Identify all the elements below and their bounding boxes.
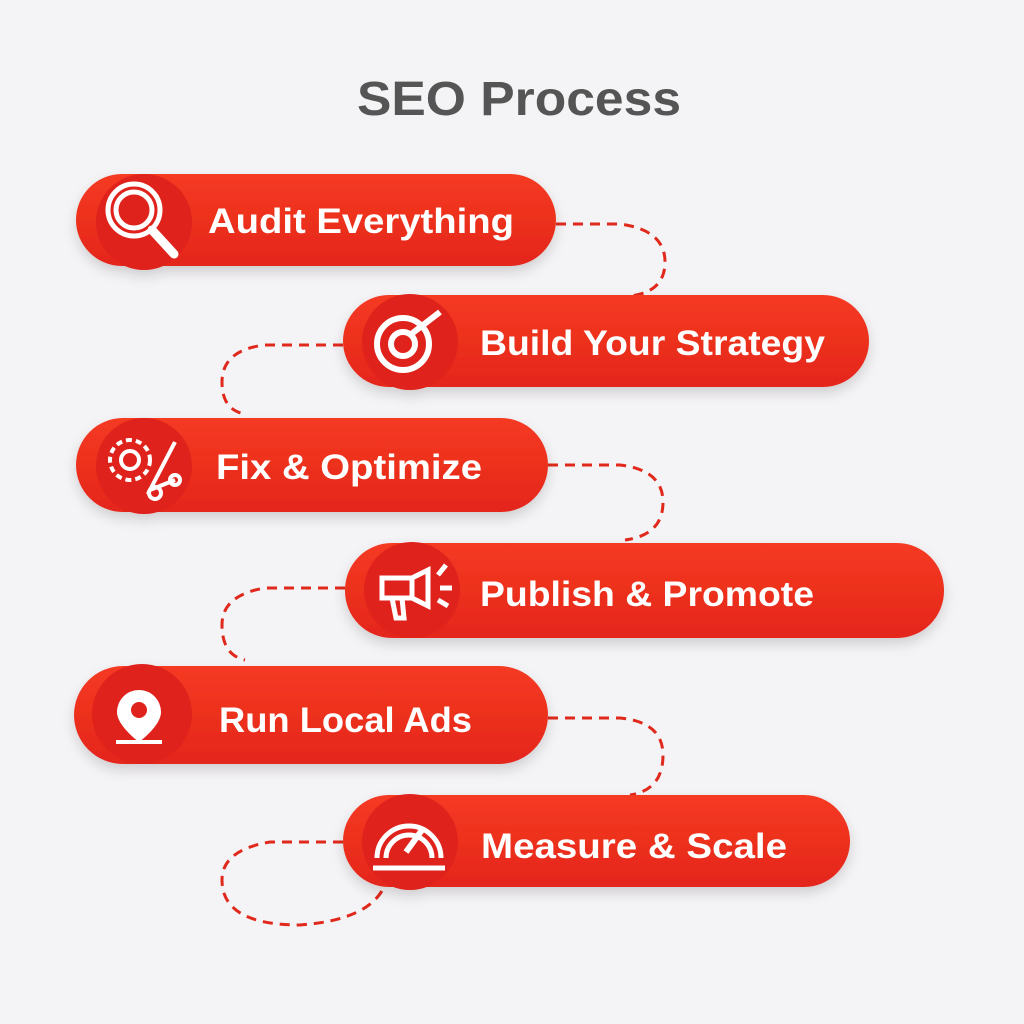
pill: Fix & Optimize <box>76 418 548 514</box>
title: SEO Process <box>357 73 681 126</box>
pill: Audit Everything <box>76 174 556 270</box>
pill: Measure & Scale: Measure & Scale <box>481 827 787 866</box>
pill: Run Local Ads <box>74 664 548 764</box>
pill: Build Your Strategy: Build Your Strategy <box>480 324 826 363</box>
pill: Fix & Optimize: Fix & Optimize <box>216 448 482 487</box>
pill: Run Local Ads: Run Local Ads <box>219 701 472 740</box>
pill: Measure & Scale <box>343 794 850 890</box>
pill: Build Your Strategy <box>343 294 869 390</box>
pill: Audit Everything: Audit Everything <box>208 202 514 241</box>
connectors <box>222 224 665 925</box>
pill: Publish & Promote <box>345 542 944 638</box>
pill: Publish & Promote: Publish & Promote <box>480 575 814 614</box>
